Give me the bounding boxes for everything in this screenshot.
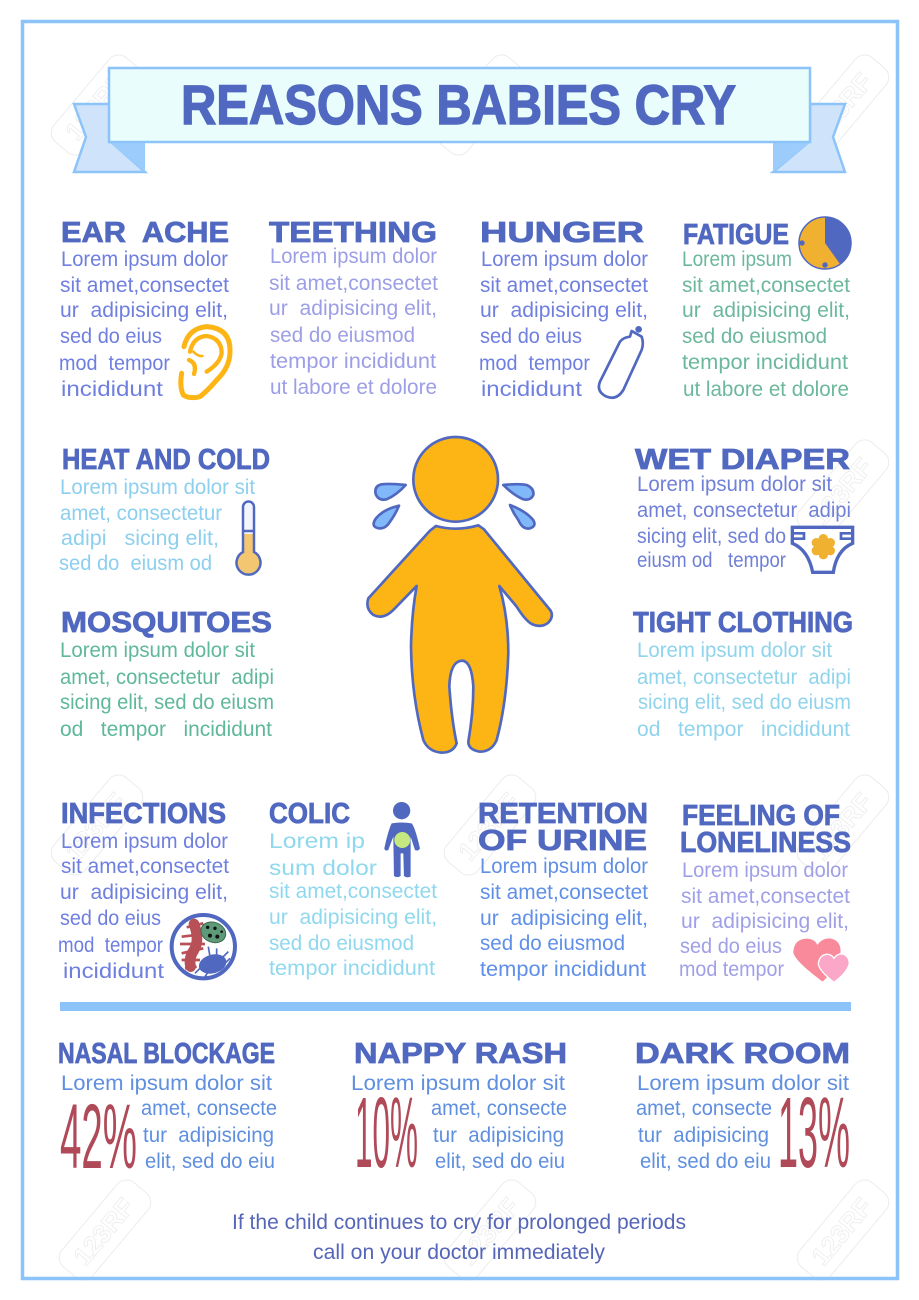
panel: ear ache (59, 217, 230, 401)
crying baby figure (367, 437, 552, 753)
heading: retention of urine: RETENTION (478, 798, 648, 830)
text: fatigue body: ur adipisicing elit, (682, 299, 850, 322)
footer note (232, 1211, 686, 1264)
panel: infections (58, 798, 235, 983)
text: ear ache body: incididunt (61, 378, 163, 401)
text: teething body: tempor incididunt (270, 350, 436, 373)
text: ear ache body: Lorem ipsum dolor (61, 248, 228, 271)
footer note: call on your doctor immediately (313, 1241, 605, 1264)
text: dark room body: elit, sed do eiu (640, 1150, 771, 1173)
text: nasal blockage body: tur adipisicing (143, 1124, 274, 1147)
text: wet diaper body: eiusm od tempor (637, 549, 786, 572)
text: tight clothing body: amet, consectetur adipi (637, 666, 851, 689)
text: retention body: ur adipisicing elit, (480, 907, 648, 930)
footer note: If the child continues to cry for prolonged periods (232, 1211, 686, 1234)
heading: retention of urine: OF URINE (478, 825, 647, 857)
baby head (413, 437, 498, 522)
icon: child with sore belly (384, 802, 420, 877)
text: mosquitoes body: sicing elit, sed do eiusm (60, 691, 274, 714)
text: colic body: sum dolor (269, 857, 377, 880)
text: tight clothing body: Lorem ipsum dolor sit (637, 639, 832, 662)
text: tight clothing body: od tempor incididunt (637, 718, 850, 741)
text: colic body: sed do eiusmod (269, 932, 414, 955)
heading: wet diaper: WET DIAPER (635, 444, 850, 476)
text: loneliness body: sed do eius (680, 935, 782, 958)
icon: baby bottle (599, 326, 643, 398)
text: 123RF (452, 1192, 525, 1271)
text: colic body: ur adipisicing elit, (269, 906, 437, 929)
text: infections body: incididunt (63, 960, 164, 983)
text: hunger body: sit amet,consectet (480, 274, 648, 297)
panel: retention of urine (478, 798, 648, 981)
panel: dark room (635, 1038, 850, 1189)
text: infections body: ur adipisicing elit, (60, 881, 228, 904)
text: teething body: sit amet,consectet (269, 272, 438, 295)
text: 123RF (59, 787, 132, 866)
text: fatigue body: tempor incididunt (682, 351, 848, 374)
text: infections body: mod tempor (58, 934, 163, 957)
text: fatigue body: ut labore et dolore (683, 378, 849, 401)
heading: ear ache: EAR ACHE (61, 217, 229, 249)
icon: diaper (792, 527, 853, 572)
text: ear ache body (59, 248, 229, 401)
text: 123RF (805, 452, 878, 531)
text: mosquitoes body (60, 639, 274, 741)
text: hunger body: mod tempor (479, 352, 590, 375)
text: retention body: tempor incididunt (480, 958, 646, 981)
title banner (74, 68, 845, 172)
text: colic body: tempor incididunt (269, 957, 435, 980)
text: heat and cold body: amet, consectetur (60, 502, 222, 525)
text: nappy rash body (351, 1072, 567, 1173)
text: fatigue body: sed do eiusmod (682, 325, 827, 348)
text: heat and cold body: Lorem ipsum dolor sit (60, 476, 255, 499)
text: infections body: sit amet,consectet (61, 855, 229, 878)
right ribbon tail (773, 104, 845, 172)
text: colic body (269, 830, 437, 980)
baby body (367, 525, 552, 753)
text: nasal blockage body: Lorem ipsum dolor sit (61, 1072, 272, 1095)
text: nasal blockage body (61, 1072, 277, 1173)
text: wet diaper body: amet, consectetur adipi (637, 499, 851, 522)
text: teething body: sed do eiusmod (270, 324, 415, 347)
heading: infections: INFECTIONS (61, 798, 226, 830)
text: 123RF (442, 67, 515, 146)
heading: tight clothing: TIGHT CLOTHING (633, 607, 853, 639)
panel: fatigue (682, 217, 851, 401)
panel: mosquitoes (60, 607, 274, 741)
text: nappy rash body: elit, sed do eiu (435, 1150, 565, 1173)
text: loneliness body: ur adipisicing elit, (681, 910, 849, 933)
text: wet diaper body: sicing elit, sed do (637, 525, 786, 548)
text: tight clothing body: sicing elit, sed do eiusm (638, 691, 851, 714)
divider bar (60, 1002, 851, 1011)
heading: nasal blockage: NASAL BLOCKAGE (58, 1038, 275, 1070)
panel: hunger (479, 217, 648, 401)
text: 123RF (67, 1192, 140, 1271)
text: heat and cold body (59, 476, 255, 575)
text: nappy rash body: Lorem ipsum dolor sit (351, 1072, 565, 1095)
icon: hearts (793, 938, 849, 982)
text: retention body (480, 855, 648, 981)
text: mosquitoes body: Lorem ipsum dolor sit (60, 639, 255, 662)
text: hunger body: sed do eius (480, 325, 582, 348)
text: 123RF (452, 787, 525, 866)
text: nasal blockage body: amet, consecte (141, 1097, 277, 1120)
text: hunger body: Lorem ipsum dolor (481, 248, 648, 271)
text: teething body: Lorem ipsum dolor (270, 245, 437, 268)
panel: heat and cold (59, 444, 270, 575)
heading: hunger: HUNGER (480, 217, 644, 249)
heading: colic: COLIC (269, 798, 350, 830)
text: colic body: Lorem ip (269, 830, 365, 853)
heading: retention of urine (478, 798, 648, 857)
tears (374, 484, 534, 529)
heading: teething: TEETHING (269, 217, 437, 249)
text: hunger body: incididunt (481, 378, 582, 401)
heading: heat and cold: HEAT AND COLD (62, 444, 270, 476)
text: ear ache body: ur adipisicing elit, (60, 299, 228, 322)
heading: dark room: DARK ROOM (635, 1038, 850, 1070)
text: 123RF (805, 67, 878, 146)
text: infections body: sed do eius (60, 907, 161, 930)
text: loneliness body: Lorem ipsum dolor (682, 859, 848, 882)
icon: germs (172, 915, 235, 978)
panel: nappy rash: 10% (355, 1077, 418, 1189)
text: infections body (58, 830, 229, 983)
text: tight clothing body (637, 639, 851, 741)
text: wet diaper body: Lorem ipsum dolor sit (637, 473, 832, 496)
text: heat and cold body: sed do eiusm od (59, 552, 212, 575)
panel: wet diaper (635, 444, 853, 572)
panel: nasal blockage (58, 1038, 277, 1188)
text: dark room body: tur adipisicing (638, 1124, 769, 1147)
text: loneliness body: mod tempor (679, 958, 784, 981)
text: loneliness body: sit amet,consectet (681, 885, 850, 908)
panel: feeling of loneliness (679, 800, 851, 982)
text: 123RF (805, 787, 878, 866)
text: wet diaper body (637, 473, 851, 572)
heading: feeling of loneliness: LONELINESS (680, 827, 851, 859)
text: dark room body (636, 1072, 849, 1173)
text: mosquitoes body: amet, consectetur adipi (60, 666, 274, 689)
text: ear ache body: sit amet,consectet (60, 274, 229, 297)
panel: teething (269, 217, 438, 399)
icon: ear (181, 327, 230, 398)
text: teething body: ur adipisicing elit, (269, 297, 437, 320)
text: hunger body (479, 248, 648, 401)
text: fatigue body (682, 248, 850, 401)
text: nappy rash body: tur adipisicing (433, 1124, 564, 1147)
text: 123RF (59, 67, 132, 146)
banner body (109, 68, 810, 142)
icon: thermometer (237, 502, 261, 575)
text: infections body: Lorem ipsum dolor (61, 830, 228, 853)
icon: clock (799, 217, 851, 269)
panel: colic (269, 798, 437, 980)
text: dark room body: Lorem ipsum dolor sit (637, 1072, 849, 1095)
heading: nappy rash: NAPPY RASH (354, 1038, 567, 1070)
text: ear ache body: mod tempor (59, 352, 170, 375)
text: nasal blockage body: elit, sed do eiu (145, 1150, 275, 1173)
text: retention body: sed do eiusmod (480, 932, 625, 955)
text: nappy rash body: amet, consecte (431, 1097, 567, 1120)
text: teething body: ut labore et dolore (270, 376, 437, 399)
heading: mosquitoes: MOSQUITOES (61, 607, 272, 639)
title: REASONS BABIES CRY (181, 73, 736, 136)
text: mosquitoes body: od tempor incididunt (60, 718, 272, 741)
text: dark room body: amet, consecte (636, 1097, 772, 1120)
left ribbon tail (74, 104, 145, 172)
text: loneliness body (679, 859, 850, 981)
text: colic body: sit amet,consectet (269, 880, 437, 903)
text: hunger body: ur adipisicing elit, (480, 299, 648, 322)
text: retention body: sit amet,consectet (480, 881, 648, 904)
panel: nasal blockage: 42% (60, 1086, 137, 1188)
panel: tight clothing (633, 607, 853, 741)
panel: nappy rash (351, 1038, 567, 1189)
text: fatigue body: Lorem ipsum (682, 248, 792, 271)
heading: feeling of loneliness (680, 800, 851, 859)
text: ear ache body: sed do eius (60, 325, 162, 348)
text: heat and cold body: adipi sicing elit, (61, 527, 219, 550)
text: retention body: Lorem ipsum dolor (480, 855, 648, 878)
text: 123RF (805, 1192, 878, 1271)
heading: fatigue: FATIGUE (683, 219, 789, 251)
text: teething body (269, 245, 438, 399)
text: fatigue body: sit amet,consectet (682, 274, 850, 297)
heading: feeling of loneliness: FEELING OF (682, 800, 840, 832)
